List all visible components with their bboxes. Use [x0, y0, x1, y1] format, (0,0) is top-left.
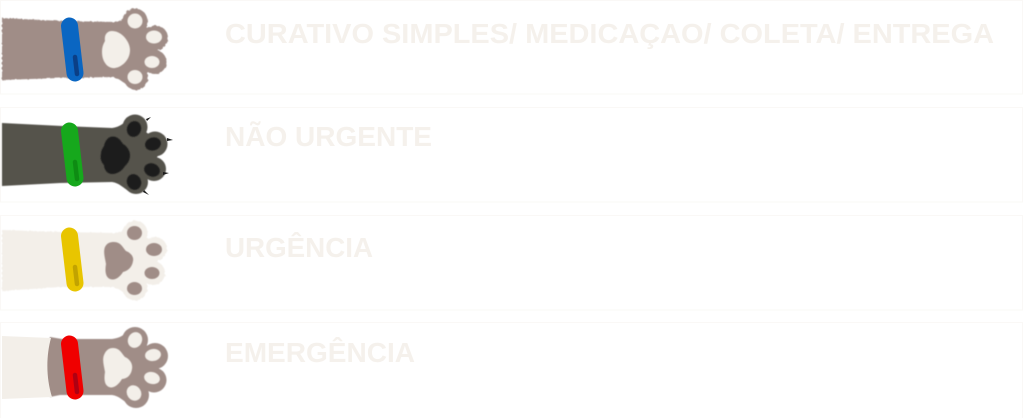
icon: light paw with yellow band [2, 220, 167, 300]
panel: urgência [0, 216, 1022, 310]
icon: two-tone paw with red band [2, 327, 168, 408]
icon: blue band [70, 26, 77, 74]
icon: green band [70, 131, 77, 179]
heading: não urgente: NÃO URGENTE [225, 121, 432, 152]
panel: não urgente [0, 108, 1022, 202]
icon: brown paw with blue band [2, 8, 168, 90]
panel: curativo simples [0, 0, 1022, 94]
heading: urgência: URGÊNCIA [225, 232, 373, 263]
icon: light fur sleeve [2, 336, 52, 399]
heading: curativo simples: CURATIVO SIMPLES/ MEDICAÇAO/ COLETA/ ENTREGA [225, 18, 994, 49]
heading: emergência: EMERGÊNCIA [225, 337, 415, 368]
icon: claws [143, 117, 173, 195]
icon: red band [70, 344, 77, 392]
icon: dark paw with green band [2, 114, 173, 195]
panel: emergência [0, 322, 1022, 418]
icon: yellow band [70, 236, 77, 284]
